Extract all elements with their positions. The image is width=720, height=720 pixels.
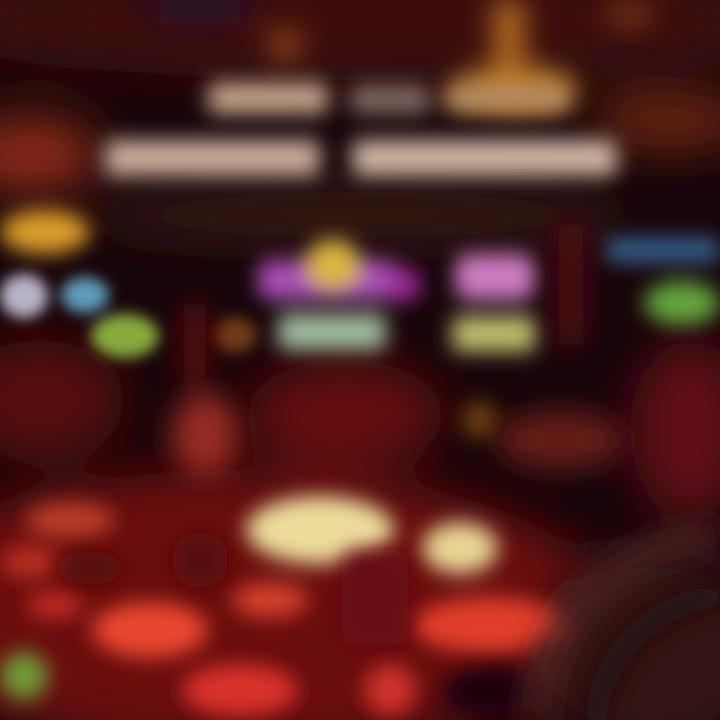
red seats: [171, 225, 625, 477]
roulette wheel: [535, 535, 720, 720]
left slot screens: [0, 274, 257, 358]
left lamp: [0, 210, 90, 254]
title: [105, 82, 617, 176]
right slot machine screen: [452, 254, 536, 438]
right side lights: [605, 238, 720, 325]
chips on table: [56, 532, 538, 718]
gaming table: [0, 496, 568, 716]
chandelier: [150, 0, 656, 110]
center slot machine screen: [258, 239, 421, 350]
